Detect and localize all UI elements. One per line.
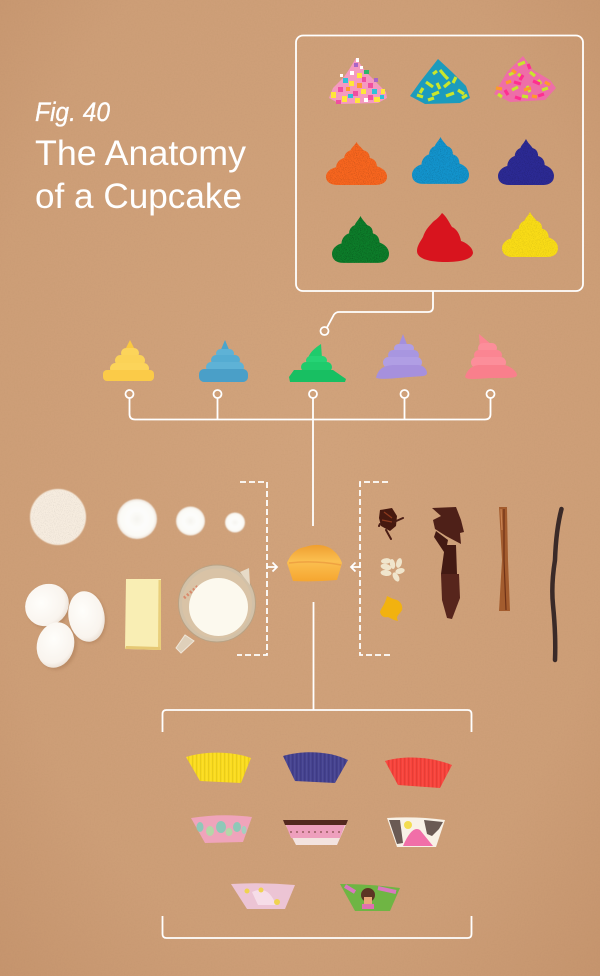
cupcake bbox=[287, 545, 342, 581]
liner: red bbox=[385, 758, 452, 788]
panel: cupcake liners bbox=[186, 752, 452, 911]
orange zest bbox=[380, 596, 402, 621]
chocolate bbox=[432, 507, 464, 619]
sprinkle pile: rainbow stars bbox=[329, 58, 387, 104]
liner: pale floral bbox=[231, 883, 295, 909]
sprinkle pile: orange bbox=[326, 142, 387, 185]
frosting connector tree bbox=[126, 390, 494, 526]
liner: yellow bbox=[186, 753, 251, 783]
frosting: pink bbox=[465, 334, 517, 379]
title block bbox=[35, 97, 247, 216]
panel: dry and wet ingredients bbox=[17, 489, 256, 674]
frosting: yellow bbox=[103, 340, 154, 381]
baking powder bbox=[176, 506, 205, 536]
measuring cup of milk bbox=[176, 565, 256, 653]
right dashed bracket with arrow bbox=[351, 482, 391, 655]
title: The Anatomy bbox=[35, 134, 247, 173]
pepitas bbox=[380, 557, 405, 583]
liner: brown and pink bbox=[283, 820, 348, 845]
cloves bbox=[379, 508, 403, 539]
liner: flower print bbox=[387, 817, 445, 847]
eggs bbox=[17, 575, 110, 674]
connector to liners bbox=[312, 602, 314, 710]
frosting: green bbox=[289, 344, 346, 382]
panel: frosting swirls bbox=[103, 334, 517, 382]
sprinkle pile: yellow bbox=[502, 212, 558, 257]
panel: sprinkles frame with connector bbox=[296, 36, 583, 335]
sprinkle pile: light blue bbox=[412, 137, 469, 184]
flour bbox=[30, 489, 86, 545]
liners bracket bbox=[162, 710, 472, 938]
frosting: blue bbox=[199, 340, 248, 382]
butter bbox=[125, 579, 161, 650]
vanilla bean bbox=[552, 509, 562, 660]
sprinkle pile: green bbox=[332, 216, 389, 263]
left dashed bracket with arrow bbox=[237, 482, 277, 655]
sprinkle pile: navy bbox=[498, 139, 554, 185]
liner: pink pattern bbox=[191, 815, 252, 843]
sprinkle pile: blue and lime bbox=[410, 59, 470, 104]
sprinkle pile: neon sticks bbox=[494, 56, 556, 102]
salt bbox=[225, 512, 245, 532]
figure number: Fig. 40 bbox=[35, 97, 110, 127]
sugar bbox=[117, 499, 157, 539]
panel: flavourings bbox=[379, 507, 562, 660]
liner: cartoon print bbox=[340, 884, 400, 911]
panel: sprinkles bbox=[326, 56, 558, 263]
title bbox=[35, 134, 247, 216]
title: of a Cupcake bbox=[35, 177, 242, 216]
liner: navy bbox=[283, 752, 348, 783]
sprinkle pile: red bbox=[417, 213, 473, 262]
cinnamon stick bbox=[499, 507, 510, 611]
frosting: purple bbox=[376, 334, 427, 379]
